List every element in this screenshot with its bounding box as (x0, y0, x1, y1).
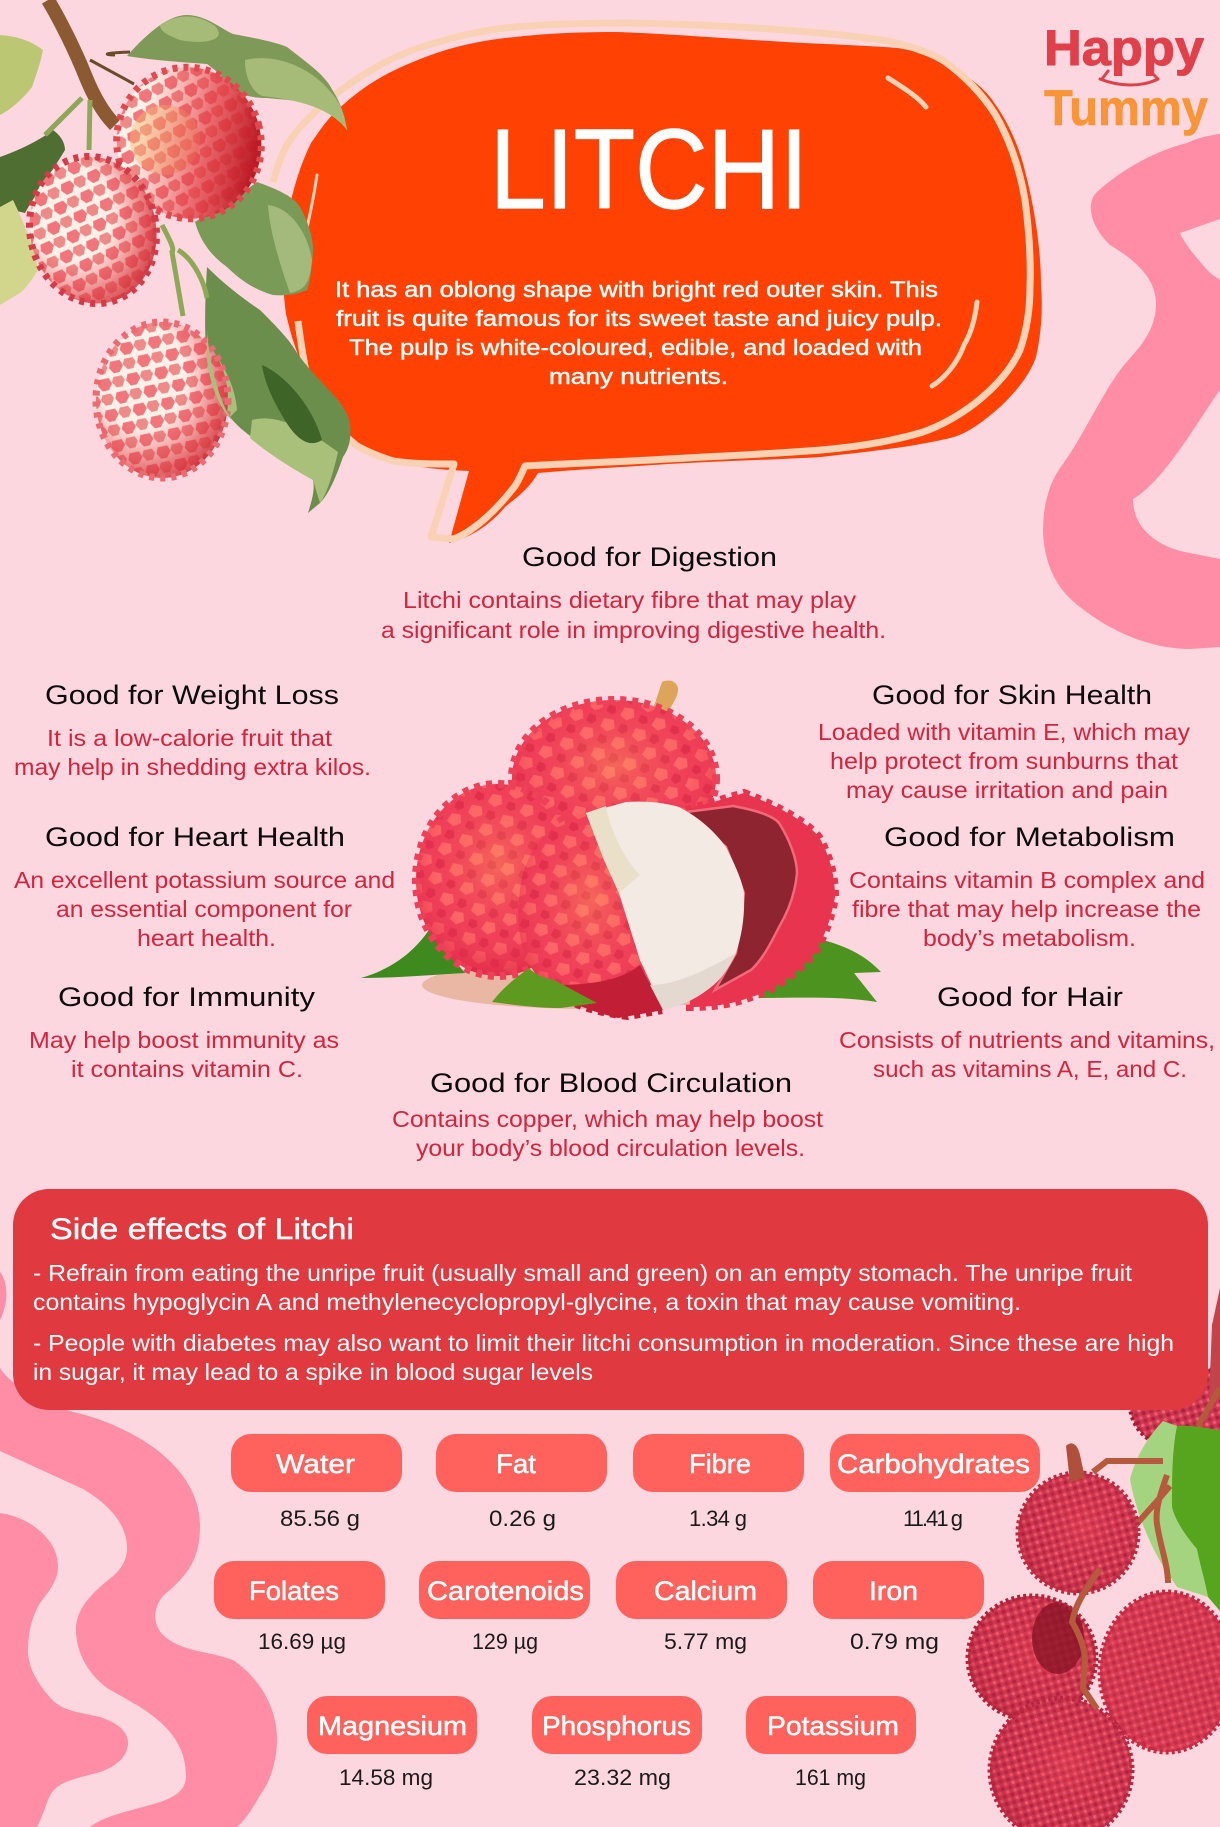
intro text: many nutrients. (549, 364, 728, 389)
benefit: digestion: Litchi contains dietary fibre that may play (403, 587, 857, 613)
benefit: skin health: Loaded with vitamin E, which may (818, 719, 1191, 745)
illustration: litchi cluster bottom right (968, 1288, 1220, 1827)
benefit: metabolism: fibre that may help increase the (852, 896, 1201, 922)
intro text: fruit is quite famous for its sweet taste and juicy pulp. (336, 306, 942, 331)
logo: Happy Tummy: Happy (1044, 20, 1204, 76)
fruit: lower (96, 322, 228, 478)
nutrient: phosphorus (532, 1696, 702, 1790)
leaf: middle (195, 182, 313, 295)
fruit: top (512, 700, 716, 856)
nutrient: carotenoids: Carotenoids (427, 1576, 584, 1606)
benefit: digestion: a significant role in improving digestive health. (381, 617, 886, 643)
benefit: heart health (14, 822, 395, 951)
benefit: skin health: may cause irritation and pain (846, 777, 1168, 803)
nutrient: phosphorus: Phosphorus (542, 1711, 691, 1741)
benefit: metabolism: Contains vitamin B complex and (849, 867, 1205, 893)
nutrient: potassium: 161 mg (795, 1765, 866, 1790)
nutrient: folates: 16.69 µg (258, 1629, 346, 1654)
benefit: skin health (818, 680, 1191, 803)
nutrient: fat: 0.26 g (489, 1506, 556, 1531)
benefit: immunity: May help boost immunity as (29, 1027, 339, 1053)
nutrient: calcium: 5.77 mg (664, 1629, 747, 1654)
nutrient: folates (214, 1561, 385, 1654)
benefit: heart health: Good for Heart Health (45, 822, 345, 852)
leaf overlapping lower fruit (207, 330, 232, 420)
nutrient: folates: Folates (249, 1576, 339, 1606)
benefit: digestion (381, 542, 886, 643)
fruit: D (990, 1698, 1132, 1827)
benefit: weight loss: Good for Weight Loss (45, 680, 339, 710)
benefit: metabolism (849, 822, 1205, 951)
leaves: far left (0, 35, 43, 115)
leaf: long lower (205, 267, 351, 513)
benefit: hair (839, 982, 1215, 1082)
nutrient: calcium (616, 1561, 787, 1654)
side effect: diabetes: in sugar, it may lead to a spike in blood sugar levels (33, 1359, 593, 1385)
nutrient: calcium: Calcium (654, 1576, 757, 1606)
nutrient: iron: 0.79 mg (850, 1629, 939, 1654)
benefit: blood circulation: Good for Blood Circulation (430, 1068, 792, 1098)
nutrient: potassium: Potassium (767, 1711, 899, 1741)
nutrient: magnesium: 14.58 mg (339, 1765, 433, 1790)
fruit: top partial (1130, 1361, 1220, 1449)
leaf: top (127, 15, 347, 130)
nutrient: carotenoids (419, 1561, 590, 1654)
nutrient: iron: Iron (869, 1576, 918, 1606)
nutrient: carbohydrates (830, 1434, 1040, 1531)
side effect: unripe fruit: contains hypoglycin A and methylenecyclopropyl-glycine, a toxin that may cause vomiting. (33, 1289, 1021, 1315)
nutrient: water (231, 1434, 402, 1531)
branch (1072, 1388, 1220, 1709)
fruit: A (1018, 1443, 1138, 1593)
logo: Happy Tummy (1044, 20, 1208, 136)
decorative squiggle: bottom left (0, 1272, 277, 1827)
nutrient: carotenoids: 129 µg (472, 1629, 538, 1654)
nutrient: iron (813, 1561, 984, 1654)
intro text (335, 277, 942, 389)
benefit: heart health: An excellent potassium source and (14, 867, 395, 893)
shell: open right half (686, 793, 835, 1007)
bubble highlight (932, 302, 977, 386)
branch (48, 0, 115, 125)
decorative squiggle: right (1043, 134, 1220, 649)
side effect: unripe fruit: - Refrain from eating the unripe fruit (usually small and green) on an empty stomach. The unripe fruit (33, 1260, 1133, 1286)
fruit: upper (100, 51, 278, 235)
side effects heading: Side effects of Litchi (50, 1213, 354, 1246)
benefit: digestion: Good for Digestion (522, 542, 777, 572)
nutrient: carbohydrates: Carbohydrates (837, 1449, 1030, 1479)
benefit: blood circulation: Contains copper, which may help boost (392, 1106, 824, 1132)
leaf: centre (492, 968, 597, 1008)
illustration: central litchi fruit (361, 680, 881, 1018)
nutrient: phosphorus: 23.32 mg (574, 1765, 671, 1790)
side effect: diabetes: - People with diabetes may also want to limit their litchi consumption in moderation. Since these are high (33, 1330, 1174, 1356)
bubble highlight (888, 78, 926, 107)
benefit: immunity: Good for Immunity (58, 982, 316, 1012)
logo: Happy Tummy: Tummy (1044, 80, 1208, 136)
nutrient: water: 85.56 g (280, 1506, 360, 1531)
illustration: litchi branch top left (0, 0, 351, 513)
nutrient: water: Water (276, 1449, 355, 1479)
benefit: hair: Good for Hair (937, 982, 1123, 1012)
benefit: weight loss: may help in shedding extra kilos. (14, 754, 371, 780)
pulp (586, 802, 744, 1010)
fruit: left (16, 145, 170, 315)
benefit: hair: such as vitamins A, E, and C. (873, 1056, 1187, 1082)
leaf: left (361, 930, 465, 978)
title: LITCHI (490, 106, 808, 232)
shell: inner dark (686, 806, 797, 990)
fruit: edge strip (1209, 1288, 1220, 1400)
benefit: skin health: help protect from sunburns that (830, 748, 1179, 774)
bubble peach outline (273, 23, 1030, 539)
nutrient: magnesium: Magnesium (318, 1711, 467, 1741)
nutrient: fat: Fat (496, 1449, 537, 1479)
fruit: left (416, 784, 580, 976)
benefit: heart health: an essential component for (56, 896, 352, 922)
benefit: immunity (29, 982, 339, 1082)
bubble highlight (306, 175, 317, 232)
stem (654, 680, 678, 724)
fruit: B (968, 1596, 1096, 1720)
speech bubble (273, 23, 1042, 543)
benefit: weight loss (14, 680, 371, 780)
nutrient: fat (436, 1434, 607, 1531)
nutrient: fibre: 1.34 g (689, 1506, 747, 1531)
side effect: unripe fruit (33, 1260, 1133, 1315)
benefit: hair: Consists of nutrients and vitamins, (839, 1027, 1215, 1053)
nutrient: carbohydrates: 11.41 g (903, 1506, 963, 1531)
benefit: weight loss: It is a low-calorie fruit that (47, 725, 333, 751)
side effect: diabetes (33, 1330, 1174, 1385)
panel: side effects (13, 1189, 1208, 1410)
nutrient: fibre: Fibre (689, 1449, 751, 1479)
benefit: blood circulation: your body’s blood circulation levels. (416, 1135, 805, 1161)
branch front (1072, 1569, 1100, 1709)
fruit: middle with pulp (492, 802, 744, 1018)
intro text: It has an oblong shape with bright red outer skin. This (335, 277, 938, 302)
bubble body (283, 32, 1042, 543)
fruit: C (1100, 1592, 1220, 1752)
benefit: skin health: Good for Skin Health (872, 680, 1152, 710)
nutrient: magnesium (307, 1696, 477, 1790)
benefit: metabolism: body’s metabolism. (923, 925, 1136, 951)
benefit: blood circulation (392, 1068, 824, 1161)
benefit: metabolism: Good for Metabolism (884, 822, 1175, 852)
logo smile (1100, 71, 1158, 85)
leaf (1130, 1421, 1220, 1611)
leaf: right (758, 938, 881, 1002)
nutrient: potassium (746, 1696, 916, 1790)
benefit: heart health: heart health. (137, 925, 276, 951)
benefit: immunity: it contains vitamin C. (71, 1056, 303, 1082)
intro text: The pulp is white-coloured, edible, and loaded with (349, 335, 922, 360)
shadow (422, 961, 758, 1009)
nutrient: fibre (633, 1434, 804, 1531)
